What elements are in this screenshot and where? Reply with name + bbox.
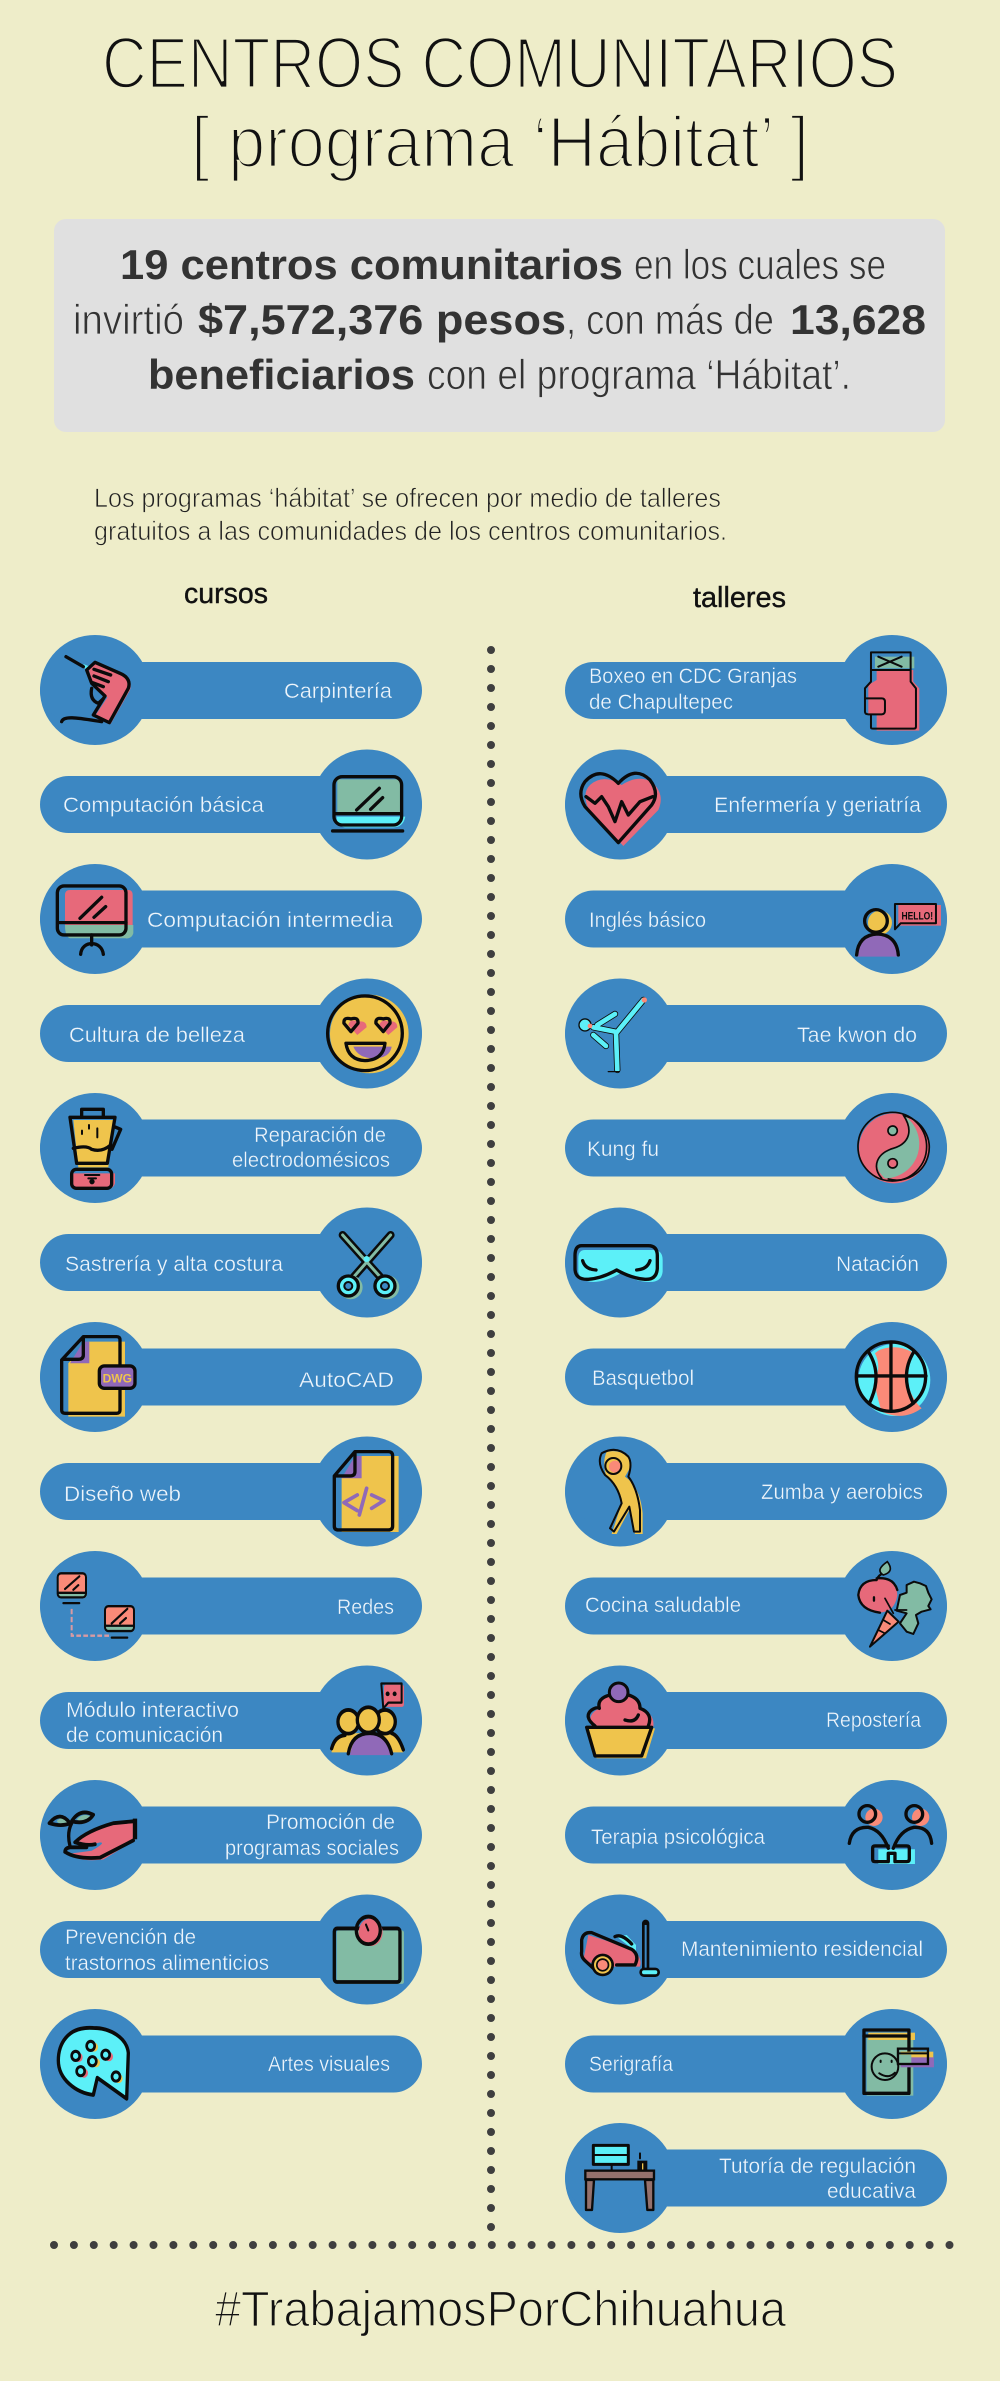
icon: networked computers: [58, 1573, 135, 1638]
label: Enfermería y geriatría: [714, 794, 921, 817]
label: Computación intermedia: [147, 909, 393, 932]
label: Prevención de: [65, 1926, 196, 1949]
column: talleres: [565, 635, 947, 2233]
icon: file DWG: DWG: [103, 1372, 132, 1386]
item: Reparación de electrodomésicos: [40, 1093, 422, 1203]
item: Inglés básico: [565, 864, 947, 974]
intro text: Los programas ‘hábitat’ se ofrecen por medio de talleres: [94, 483, 721, 513]
panel: summary: invirtió: [73, 296, 184, 343]
column: cursos: [40, 635, 422, 2119]
heading: talleres: talleres: [693, 582, 786, 614]
icon: drill: [62, 657, 131, 724]
icon: hand with sprout: [49, 1812, 135, 1860]
heading: cursos: cursos: [184, 578, 268, 610]
label: Promoción de: [266, 1811, 395, 1834]
label: Zumba y aerobics: [761, 1481, 923, 1504]
item: Promoción de programas sociales: [40, 1780, 422, 1890]
panel: summary: , con más de: [566, 296, 774, 343]
label: Natación: [836, 1253, 919, 1276]
item: AutoCAD: [40, 1322, 422, 1432]
icon: basketball: [856, 1342, 930, 1416]
label: [589, 665, 797, 714]
label: Artes visuales: [268, 2053, 390, 2076]
icon: yin yang: [858, 1112, 929, 1183]
item: Prevención de trastornos alimenticios: [40, 1894, 422, 2004]
item: Sastrería y alta costura: [40, 1208, 422, 1318]
label: de comunicación: [66, 1724, 223, 1747]
item: Enfermería y geriatría: [565, 750, 947, 860]
label: Diseño web: [64, 1483, 181, 1506]
item: Artes visuales: [40, 2009, 422, 2119]
panel: summary: 13,628: [790, 296, 926, 343]
icon: weighing scale: [334, 1917, 404, 1984]
panel: summary: 19 centros comunitarios: [120, 241, 623, 288]
intro text: gratuitos a las comunidades de los centros comunitarios.: [94, 516, 727, 546]
item: Serigrafía: [565, 2009, 947, 2119]
icon: stretching figure: [600, 1450, 643, 1534]
item: Repostería: [565, 1666, 947, 1776]
panel: summary: con el programa ‘Hábitat’.: [427, 351, 851, 398]
label: Cultura de belleza: [69, 1024, 245, 1047]
icon: scissors: [338, 1235, 399, 1299]
label: Redes: [337, 1596, 394, 1619]
hashtag footer: #TrabajamosPorChihuahua: [215, 2281, 786, 2337]
label: Módulo interactivo: [66, 1699, 239, 1722]
icon: group with chat bubble: [332, 1684, 404, 1755]
label: trastornos alimenticios: [65, 1952, 269, 1975]
item: Boxeo en CDC Granjas de Chapultepec: [565, 635, 947, 745]
label: Reparación de: [254, 1124, 386, 1147]
label: [719, 2155, 916, 2203]
icon: file code: [334, 1452, 399, 1532]
label: educativa: [827, 2180, 916, 2203]
icon: heart pulse: [581, 773, 661, 846]
panel: summary: [54, 219, 945, 432]
item: Mantenimiento residencial: [565, 1894, 947, 2004]
item: Terapia psicológica: [565, 1780, 947, 1890]
label: programas sociales: [225, 1837, 399, 1860]
label: electrodomésicos: [232, 1149, 390, 1172]
title: [ programa ‘Hábitat’ ]: [191, 103, 809, 183]
panel: summary: $7,572,376 pesos: [198, 296, 566, 343]
icon: fruits and vegetables: [858, 1562, 932, 1647]
icon: vacuum cleaner: [581, 1923, 659, 1976]
label: Serigrafía: [589, 2053, 673, 2076]
label: Cocina saludable: [585, 1594, 741, 1617]
label: Carpintería: [284, 680, 392, 703]
item: Zumba y aerobics: [565, 1436, 947, 1546]
label: Inglés básico: [589, 909, 706, 932]
label: Repostería: [826, 1709, 921, 1732]
label: AutoCAD: [299, 1369, 394, 1392]
label: [232, 1124, 390, 1172]
label: Mantenimiento residencial: [681, 1938, 923, 1961]
panel: summary: en los cuales se: [634, 241, 886, 288]
icon: palette: [58, 2028, 128, 2099]
icon: person saying hello: HELLO!: [901, 910, 933, 922]
item: Basquetbol: [565, 1322, 947, 1432]
icon: file DWG: [62, 1337, 135, 1417]
item: Diseño web: [40, 1436, 422, 1546]
item: Kung fu: [565, 1093, 947, 1203]
item: Redes: [40, 1551, 422, 1661]
item: Cocina saludable: [565, 1551, 947, 1661]
title: [102, 24, 898, 183]
icon: desk with computer: [585, 2145, 654, 2210]
label: [66, 1699, 239, 1747]
icon: screen print: [864, 2030, 934, 2096]
icon: laptop: [333, 777, 405, 831]
item: Natación: [565, 1208, 947, 1318]
icon: person saying hello: [857, 904, 941, 957]
item: Cultura de belleza: [40, 978, 422, 1088]
item: Módulo interactivo de comunicación: [40, 1666, 422, 1776]
icon: two people talking: [849, 1806, 932, 1864]
label: [65, 1926, 269, 1975]
icon: swim goggles: [575, 1246, 663, 1282]
item: Tutoría de regulación educativa: [565, 2123, 947, 2233]
label: Basquetbol: [592, 1367, 694, 1390]
icon: screen: [57, 886, 133, 954]
label: Tae kwon do: [797, 1024, 917, 1047]
label: Terapia psicológica: [591, 1826, 765, 1849]
icon: boxing glove: [865, 652, 919, 731]
label: [225, 1811, 399, 1860]
icon: cupcake: [587, 1683, 655, 1758]
label: Boxeo en CDC Granjas: [589, 665, 797, 688]
icon: kicking figure: [579, 997, 647, 1072]
icon: emoji: [328, 995, 409, 1073]
icon: blender: [70, 1109, 121, 1189]
item: Carpintería: [40, 635, 422, 745]
item: Computación intermedia: [40, 864, 422, 974]
label: Sastrería y alta costura: [65, 1253, 283, 1276]
label: de Chapultepec: [589, 691, 733, 714]
intro text: [94, 483, 727, 546]
label: Tutoría de regulación: [719, 2155, 916, 2178]
item: Computación básica: [40, 750, 422, 860]
panel: summary: beneficiarios: [148, 351, 415, 398]
label: Computación básica: [63, 794, 264, 817]
label: Kung fu: [587, 1138, 659, 1161]
item: Tae kwon do: [565, 978, 947, 1088]
